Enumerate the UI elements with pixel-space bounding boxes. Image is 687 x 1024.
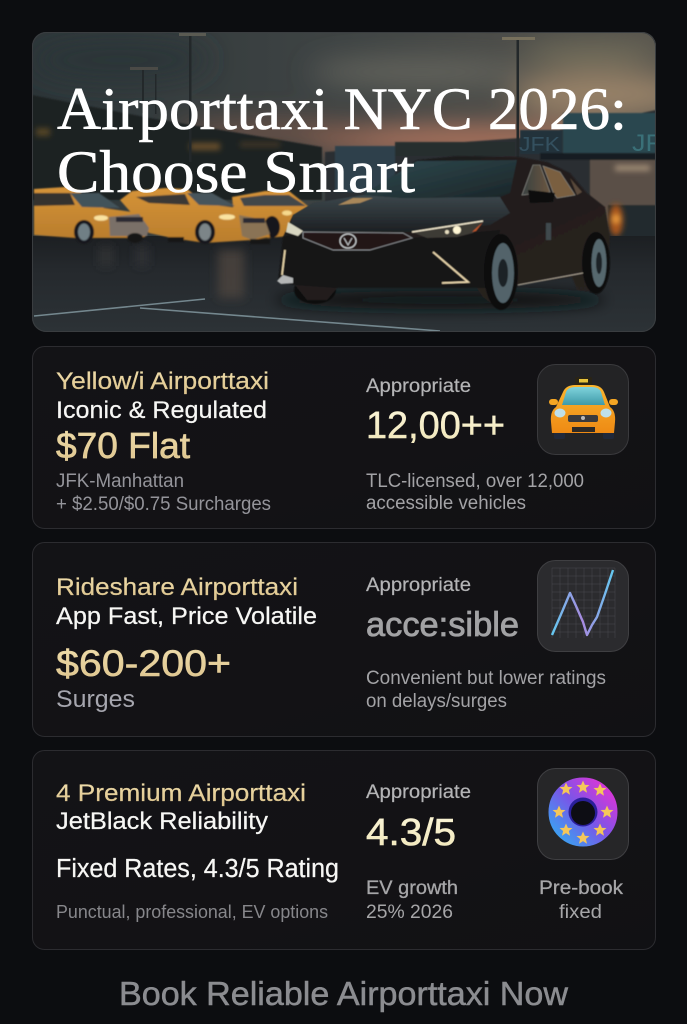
fixed rates and rating: Fixed Rates, 4.3/5 Rating bbox=[56, 855, 339, 883]
icon: star donut bbox=[538, 768, 628, 860]
black sedan bbox=[275, 156, 610, 310]
panel: rideshare airport taxi bbox=[32, 542, 656, 736]
heading: yellow airporttaxi: Yellow/i Airporttaxi bbox=[56, 368, 269, 395]
panel: premium airport taxi bbox=[32, 750, 656, 950]
hood bbox=[290, 195, 510, 232]
stat: rating: 4.3/5 bbox=[366, 812, 456, 854]
light poles bbox=[130, 33, 535, 163]
subheading: app fast, price volatile: App Fast, Price Volatile bbox=[56, 603, 317, 630]
icon: taxi bbox=[538, 364, 628, 454]
price range: $60-200+ bbox=[56, 643, 231, 684]
call to action: Book Reliable Airporttaxi Now bbox=[119, 975, 568, 1012]
label: appropriate: Appropriate bbox=[366, 376, 471, 397]
heading: premium airporttaxi: 4 Premium Airporttaxi bbox=[56, 780, 306, 807]
ev growth note: EV growth bbox=[366, 878, 458, 899]
windshield bbox=[363, 160, 517, 198]
front fascia bbox=[278, 230, 500, 288]
yellow taxis bbox=[34, 187, 309, 244]
terminal building bbox=[32, 95, 656, 240]
route and surcharges: JFK-Manhattan bbox=[56, 471, 184, 492]
stat: fleet size: 12,00++ bbox=[366, 405, 505, 447]
ev growth note bbox=[366, 878, 458, 923]
title: Choose Smart bbox=[57, 139, 415, 205]
rideshare description bbox=[366, 668, 606, 712]
label: appropriate: Appropriate bbox=[366, 782, 471, 803]
ground bbox=[32, 236, 656, 332]
route and surcharges: + $2.50/$0.75 Surcharges bbox=[56, 494, 271, 515]
airport signs: JFK bbox=[519, 134, 561, 156]
parking lines bbox=[34, 299, 440, 331]
wheels bbox=[484, 234, 518, 310]
icon: volatile price chart bbox=[538, 560, 628, 652]
panel: yellow airport taxi bbox=[32, 346, 656, 528]
title: Airporttaxi NYC 2026: bbox=[57, 76, 627, 142]
rideshare description: on delays/surges bbox=[366, 691, 507, 712]
headlights bbox=[414, 222, 481, 238]
premium description: Punctual, professional, EV options bbox=[56, 902, 328, 922]
surges note: Surges bbox=[56, 686, 135, 713]
pre-book note: fixed bbox=[559, 902, 602, 923]
fleet description bbox=[366, 471, 584, 514]
side windows bbox=[522, 165, 550, 195]
hero border bbox=[32, 32, 656, 332]
route and surcharges bbox=[56, 471, 271, 515]
rideshare description: Convenient but lower ratings bbox=[366, 668, 606, 689]
title bbox=[57, 76, 627, 205]
panel: hero photo: JF bbox=[632, 130, 662, 157]
subheading: jetblack reliability: JetBlack Reliability bbox=[56, 808, 269, 835]
stat: accessible: acce:sible bbox=[366, 606, 519, 644]
pre-book note: Pre-book bbox=[539, 878, 624, 899]
price: 70 flat: $70 Flat bbox=[56, 425, 190, 466]
fleet description: TLC-licensed, over 12,000 bbox=[366, 471, 584, 492]
heading: rideshare airporttaxi: Rideshare Airporttaxi bbox=[56, 574, 298, 601]
panel: hero photo bbox=[30, 32, 687, 332]
fleet description: accessible vehicles bbox=[366, 493, 526, 514]
grille and logo bbox=[303, 232, 412, 250]
hood reflection bbox=[338, 198, 373, 205]
label: appropriate: Appropriate bbox=[366, 575, 471, 596]
subheading: iconic and regulated: Iconic & Regulated bbox=[56, 397, 267, 424]
ev growth note: 25% 2026 bbox=[366, 902, 453, 923]
pre-book note bbox=[539, 878, 624, 923]
